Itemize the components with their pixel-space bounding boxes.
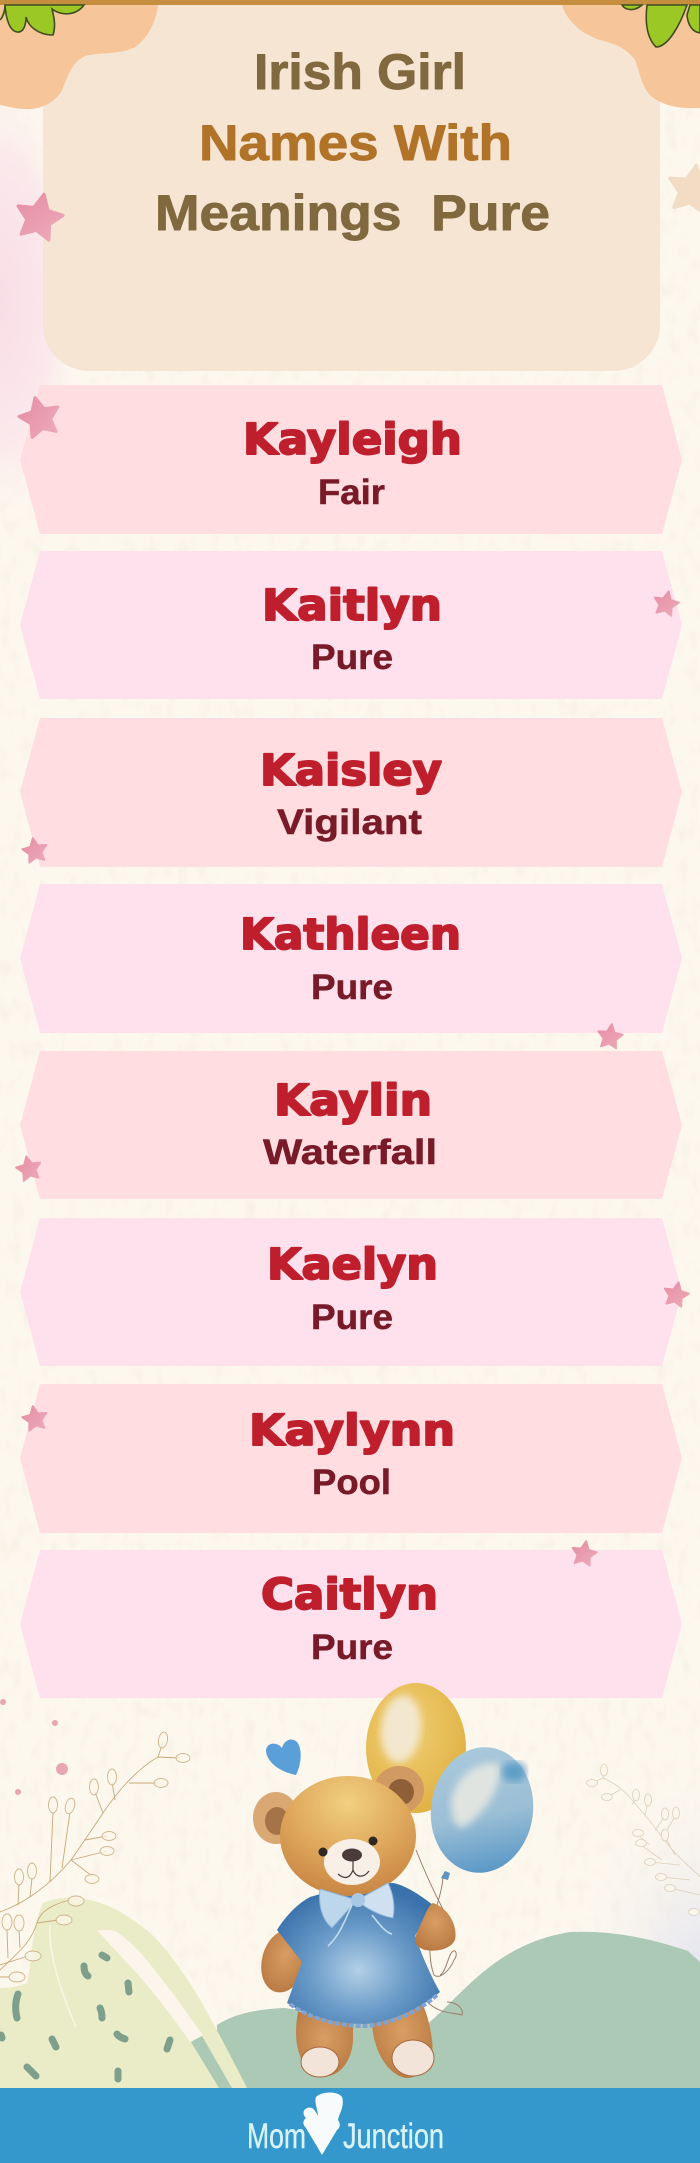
logo: MomJunction: Mom xyxy=(247,2117,306,2156)
title xyxy=(155,44,550,241)
title: Meanings Pure xyxy=(155,185,550,241)
card: Kaylin: Waterfall xyxy=(263,1133,437,1172)
icon: mother and child xyxy=(303,2092,343,2155)
icon: leaves top left xyxy=(0,5,84,35)
card: Kayleigh xyxy=(20,385,682,534)
ears xyxy=(253,1792,299,1844)
head xyxy=(280,1776,416,1896)
balloon strings xyxy=(416,1850,462,2015)
icon: blue heart xyxy=(266,1740,301,1775)
footer bar xyxy=(0,2088,700,2163)
card: Kaisley: Kaisley xyxy=(260,746,442,796)
logo: MomJunction: Junction xyxy=(343,2117,444,2156)
legs xyxy=(296,2012,353,2077)
card: Kaitlyn: Kaitlyn xyxy=(262,581,442,631)
teddy bear xyxy=(253,1766,456,2078)
stars over cards xyxy=(14,393,691,1567)
pink dots xyxy=(0,1699,68,1795)
icon: leaves top right xyxy=(622,5,700,47)
card: Kaylynn xyxy=(20,1384,682,1533)
card: Kaylynn: Kaylynn xyxy=(249,1406,455,1456)
green hills xyxy=(217,1932,700,2088)
card: Kathleen: Pure xyxy=(311,968,393,1007)
corner blob: top right xyxy=(562,5,700,108)
corner blob: top left xyxy=(0,5,158,109)
card: Kaisley: Vigilant xyxy=(277,803,422,842)
branch: left xyxy=(0,1731,190,1982)
card: Kaelyn xyxy=(20,1218,682,1366)
balloon: blue xyxy=(423,1741,541,1880)
eyes and nose xyxy=(318,1848,328,1856)
star: beige right edge xyxy=(665,161,700,214)
title: Names With xyxy=(199,115,512,171)
card: Kaylin xyxy=(20,1051,682,1199)
bow xyxy=(320,1889,357,1928)
balloon: yellow xyxy=(366,1683,466,1813)
dress xyxy=(277,1883,440,2024)
star: beside title xyxy=(13,190,66,242)
card: Kaelyn: Kaelyn xyxy=(267,1240,438,1290)
card: Caitlyn: Caitlyn xyxy=(261,1570,438,1620)
card: Kaisley xyxy=(20,718,682,867)
card: Kaelyn: Pure xyxy=(311,1298,393,1337)
card: Kathleen: Kathleen xyxy=(240,910,461,960)
title: Irish Girl xyxy=(254,44,466,100)
title panel xyxy=(43,5,660,371)
card: Caitlyn: Pure xyxy=(311,1628,393,1667)
card: Kaitlyn xyxy=(20,551,682,699)
card: Kayleigh: Fair xyxy=(318,473,385,512)
card: Kaitlyn: Pure xyxy=(311,638,393,677)
card: Kaylin: Kaylin xyxy=(274,1076,432,1126)
card: Caitlyn xyxy=(20,1550,682,1698)
top bar xyxy=(0,0,700,5)
card: Kayleigh: Kayleigh xyxy=(243,415,462,465)
card: Kaylynn: Pool xyxy=(312,1463,391,1502)
dress hem xyxy=(290,1994,438,2026)
logo: MomJunction xyxy=(247,2092,444,2156)
left arm xyxy=(254,1924,314,1998)
right hand xyxy=(415,1903,456,1951)
cream stripe xyxy=(97,1930,203,2042)
light green hill with dashes xyxy=(0,1898,247,2088)
green wedge xyxy=(191,2036,232,2088)
card: Kathleen xyxy=(20,884,682,1033)
muzzle xyxy=(324,1839,380,1885)
branch: right xyxy=(586,1764,700,1916)
